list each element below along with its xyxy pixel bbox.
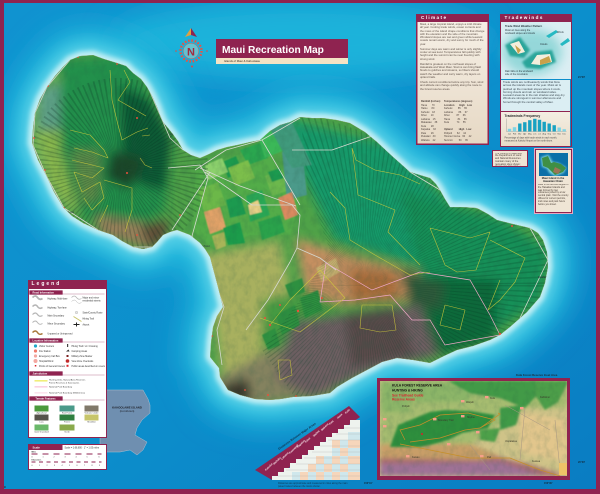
road information section: Road Information	[32, 290, 54, 294]
terrain features section: Scrub	[64, 432, 70, 434]
climate data tables	[421, 100, 472, 142]
tradewind frequency chart: measured at Kahului Airport on the north shore.	[504, 140, 553, 142]
scale heading: Scale	[32, 446, 40, 450]
scale bars: 8	[92, 465, 93, 467]
inset place labels: Waipoli	[466, 401, 474, 404]
road information section: Highway, Multi-lane	[48, 298, 68, 300]
title banner: Islands of Maui & Kahoolawe	[224, 59, 261, 63]
tradewinds heading	[500, 14, 572, 22]
climate and tradewinds frames	[416, 14, 489, 145]
tradewind frequency chart	[501, 112, 570, 146]
coastal place names: Hana	[512, 219, 519, 222]
climate data tables: Rainfall (inches) Hana 70 Haiku 80 Kahului 18 Kihei 10 Lahaina 15 Makawao 38 Kula 28 Kapalua 33 Paia 26 Pukalani 30 Wailuku 22	[421, 100, 440, 142]
coordinate ticks: 156°00'	[544, 482, 553, 485]
scale bars	[32, 452, 102, 467]
compass rose: N	[187, 46, 195, 58]
coastal place names: Makena	[182, 330, 192, 333]
inset place labels	[402, 396, 550, 463]
location information section: Military Zone Marker	[72, 355, 93, 358]
road information section: Unpaved or Unimproved	[48, 332, 73, 336]
Kula forest reserve inset: Kula Forest Reserve Inset Area	[516, 373, 558, 377]
scale bars: 5	[86, 456, 88, 458]
location information section: Hiking Trail / Ltr. Crossing	[72, 345, 98, 348]
tradewinds diagram: windward slopes and clouds	[505, 32, 536, 35]
Kahoolawe island shape	[100, 390, 150, 455]
coastal place names: Honokeana	[19, 103, 32, 106]
inset place labels: Boundary Trail	[438, 419, 454, 422]
legend heading	[28, 280, 106, 288]
coordinate ticks: 60	[3, 486, 6, 489]
coastal place names: Kamaole	[176, 270, 186, 273]
tradewinds heading: Tradewinds	[504, 14, 544, 20]
roads	[33, 60, 548, 365]
road information section: Minor Secondary	[48, 322, 66, 326]
tradewind frequency chart: Aug	[543, 132, 546, 136]
scale bars: 2	[46, 465, 48, 467]
coastal place names: Kahana	[24, 111, 33, 114]
tradewind frequency chart: May	[528, 134, 532, 136]
relief ridges	[73, 123, 460, 380]
terrain colours	[32, 55, 548, 400]
climate paragraphs: Summer days are warm and winter is only slightly cooler at sea level. Temperatures fall quickly with height and the summit can be near freezing with strong wind.	[420, 47, 481, 60]
tradewind frequency chart: Jun	[533, 134, 536, 136]
Kula forest reserve inset	[377, 373, 570, 480]
mileage triangle chart: paved routes between the towns shown.	[278, 485, 321, 488]
coastal place names: Lahaina	[26, 171, 36, 174]
title banner: Maui Recreation Map	[222, 45, 324, 56]
upcountry farm patches	[262, 258, 340, 350]
Kahoolawe island shape: KAHOOLAWE ISLAND	[112, 406, 142, 410]
coastal place names: Kahakuloa	[112, 56, 124, 59]
terrain features section: Open Grassland	[34, 432, 49, 434]
Kahoolawe island shape: (not shown)	[120, 409, 134, 413]
tradewind frequency chart: Jan	[508, 134, 511, 136]
scale bars: 1	[39, 465, 40, 467]
terrain features section: Volcanic Cinder	[85, 412, 99, 414]
jurisdiction section: Forest Reserves & Sanctuaries	[49, 382, 80, 384]
scale heading	[28, 444, 100, 450]
scale bars: 2	[54, 456, 55, 458]
scale bars: 4	[62, 465, 63, 467]
divider	[500, 110, 570, 112]
panel: climate heading: Climate	[421, 15, 447, 20]
scale bars: 1	[42, 456, 44, 458]
coastal place names: Kealia Pond	[196, 245, 210, 248]
terrain features section: Rain Forest	[62, 412, 73, 414]
coastal place names: La Perouse	[188, 348, 201, 351]
tradewinds text: Trade winds are northeasterly winds that blow across the islands most of the year. Moist air is pushed up the mountain slopes where it cools, forming clouds and rain on windward sides. Leeward areas lie in the rain shadow and stay dry. Winds are strongest in summer afternoons and funnel through the central valley of Maui.	[503, 80, 565, 104]
tradewinds diagram: Trade Wind Weather Pattern	[505, 24, 543, 28]
inset place labels: Pali	[487, 456, 491, 459]
diagonal place names: Kaanapali	[288, 443, 300, 455]
coastal place names: Hamoa	[552, 226, 561, 229]
locator caption: Maui Island in the Hawaiian Chain	[542, 177, 564, 183]
jurisdiction section: Hunting Units, Natural Area Reserves	[49, 378, 86, 382]
coastal place names	[68, 133, 546, 278]
location information section	[30, 338, 107, 368]
inset place labels: Skyline	[467, 416, 475, 419]
terrain features section: Forest	[64, 420, 70, 424]
coastal place names: Nahiku	[455, 198, 463, 201]
locator map	[539, 153, 568, 176]
coastal place names: Hookipa	[258, 126, 268, 129]
inset place labels: Kanaio	[412, 456, 420, 459]
coastal place names: Black Rock	[20, 153, 33, 156]
coastal place names: Kihei	[175, 256, 181, 259]
road information section: Major and minor	[82, 296, 99, 300]
tradewind frequency chart: Mar	[518, 132, 522, 136]
terrain features section: Shoreline	[87, 422, 97, 424]
jurisdiction section: National Park Boundary (Wilderness)	[49, 392, 85, 394]
coastal place names: Papalaua	[70, 226, 81, 229]
diagonal place names: Makena	[320, 422, 330, 432]
tradewinds diagram: Moist air rises along the	[505, 29, 531, 32]
location information section: Emergency Call Box	[39, 355, 61, 358]
coastline	[32, 55, 548, 400]
coastal place names: Wailua	[430, 168, 438, 171]
panel: tradewinds	[500, 14, 572, 147]
title banner	[216, 39, 348, 64]
panel: climate heading	[416, 14, 489, 22]
climate paragraphs: Check current conditions before any trip. Sun, wind and altitude can change quickly along the route to the forest reserve areas.	[420, 80, 483, 90]
tradewinds diagram: Clouds	[540, 43, 548, 46]
location information section: Visitor Centers	[39, 345, 55, 348]
location information section: Location Information	[32, 338, 59, 342]
diagonal place names	[264, 408, 351, 472]
scale bars: 3	[64, 456, 66, 458]
terrain features section: Terrain Features	[35, 396, 56, 400]
jurisdiction section: National Park Boundary	[49, 386, 73, 388]
panel: legend	[28, 280, 107, 438]
coastal place names: Koki Beach	[553, 238, 566, 241]
legend heading: Legend	[32, 280, 61, 286]
scale heading: Scale = 1:66,800 · 1" = 1.05 miles	[64, 448, 100, 450]
coastal place names: Launiupoko	[30, 189, 44, 192]
scale bars: Miles	[32, 452, 36, 454]
climate paragraphs: Rainfall is greatest on the northeast slopes of Haleakala and West Maui. Storms can bring flash floods to gulches and streams, so hikers should watch the weather and carry warm, dry layers on upland trails.	[420, 62, 481, 79]
road information section: Hiking Trail	[82, 318, 94, 320]
scale bars: Kilometers	[32, 458, 41, 462]
road information section: Main Secondary	[48, 314, 65, 318]
coastal place names: Ukumehame	[60, 211, 75, 214]
location information section: View Zone Overlooks	[72, 360, 94, 363]
road information section: Airport	[82, 324, 90, 326]
diagonal place names: Wailuku	[272, 456, 282, 466]
coastal place names: Kahului	[182, 145, 191, 148]
climate paragraphs	[420, 23, 484, 90]
note panel	[492, 150, 528, 167]
scale bars: 0	[32, 465, 33, 467]
coastal place names: Kaupo	[420, 368, 428, 371]
coastal place names: Kipahulu	[538, 276, 548, 279]
location information section: Fire Station	[39, 350, 51, 353]
tradewinds text	[501, 80, 570, 111]
inset place labels: Polipoli	[402, 405, 410, 408]
coastal place names: Kapalua	[22, 82, 32, 85]
tradewind frequency chart: Percentage of days with trade winds in each month,	[504, 136, 557, 140]
footnote: Distances are approximate and measured in miles along the main	[278, 482, 348, 485]
jurisdiction section	[30, 372, 104, 394]
coastal place names: Keanae	[415, 161, 424, 164]
mileage triangle chart	[255, 406, 360, 488]
national park boundary	[320, 263, 500, 345]
inset place labels: Kula	[490, 397, 495, 400]
tradewind frequency chart: Oct	[553, 132, 556, 136]
inset heading: Reserve Areas	[392, 398, 415, 402]
scale bars: 3	[54, 465, 55, 467]
scale bars: 4	[76, 456, 77, 458]
diagonal place names: Wailea	[312, 429, 321, 438]
diagonal place names: Kula	[344, 408, 351, 415]
forest reserve trails	[70, 70, 525, 380]
coastal place names: McGregor Point	[98, 236, 116, 239]
coastal place names: Honokowai	[18, 124, 31, 127]
coastal place names: Kanaio	[258, 403, 266, 406]
compass rose	[175, 28, 208, 68]
tradewind frequency chart: Nov	[558, 134, 561, 136]
tradewind frequency chart: Sep	[548, 134, 551, 136]
park and landmark markers	[33, 56, 546, 397]
coastal place names: Polo Beach	[178, 312, 191, 315]
inset heading	[392, 384, 443, 402]
tradewinds diagram: Rain falls on the windward	[505, 70, 534, 73]
road information section: State/County Route	[82, 312, 103, 314]
locator card	[535, 149, 572, 213]
panel: scale bar	[28, 444, 107, 470]
climate text block	[420, 23, 484, 142]
scale bars: 0	[32, 456, 33, 458]
tradewinds diagram: side of the mountains	[505, 73, 529, 76]
diagonal place names: Kapalua	[296, 438, 306, 449]
inset place labels: Kahikinui	[540, 396, 550, 399]
coastal place names: Keawakapu	[178, 285, 192, 288]
scale bars: 6	[98, 456, 100, 458]
isthmus farmland	[192, 122, 312, 250]
tradewind frequency chart: Feb	[513, 134, 516, 136]
scale bars: 6	[76, 465, 78, 467]
coordinate ticks: 20°30'	[578, 461, 586, 464]
diagonal place names: Kihei	[304, 436, 311, 444]
coastal place names: Maalaea	[136, 250, 146, 253]
triangle caption: Distances Between Major Areas	[277, 421, 317, 451]
road information section	[30, 290, 104, 336]
tradewind frequency chart: Jul	[538, 134, 541, 136]
coordinate ticks: 21°00'	[578, 76, 586, 79]
coastal place names: Kaanapali	[20, 140, 32, 143]
coastal place names: Wailea	[176, 298, 184, 301]
coastal place names: Hana Hwy	[484, 201, 496, 204]
coastal place names: Olowalu	[44, 200, 54, 203]
road information section: Highway, Two-lane	[48, 308, 67, 310]
inset heading: See Trailhead Guide	[392, 394, 424, 398]
road information section: residential streets	[82, 300, 101, 302]
coordinate ticks: 156°10'	[364, 482, 373, 485]
tradewind frequency chart: Dec	[563, 134, 566, 136]
inset heading: HUNTING & HIKING	[392, 388, 423, 392]
coastal place names: Honokohau	[66, 51, 79, 54]
inset place labels: Ulupalakua	[505, 440, 518, 443]
coastal place names: Kipahulu	[500, 343, 510, 346]
diagonal place names: Paia	[328, 419, 335, 426]
coastal place names: Haiku	[283, 110, 290, 113]
location information section: Hospital/Clinic	[39, 360, 54, 363]
tradewinds diagram: Winds	[557, 31, 564, 34]
terrain features section	[30, 396, 104, 434]
coastal place names: Wailuku	[170, 133, 179, 136]
inset heading: KULA FOREST RESERVE AREA	[392, 384, 443, 388]
coastal place names: Waihee Point	[140, 64, 155, 67]
tradewinds diagram	[501, 22, 571, 79]
scale bars: 5	[69, 465, 70, 467]
terrain features section: Agricultural	[36, 412, 47, 414]
diagonal place names: Kahului	[264, 462, 274, 472]
terrain features section: Lava	[39, 422, 45, 424]
diagonal place names: Hana	[336, 412, 344, 420]
coastal place names: Paia	[228, 138, 234, 141]
inset place labels: Keokea	[532, 460, 541, 463]
jurisdiction section: Jurisdiction	[32, 372, 48, 376]
tradewind frequency chart: Apr	[523, 132, 527, 136]
location information section: Camping Areas	[72, 350, 88, 353]
climate data tables: Temperatures (degrees) Location High Low Kahului 85 65 Lahaina 86 67 Kihei 87 66 Hana 81 65 Kula 74 55 Upland High Low Polipoli 62 44 Hosmer Grove 60 42 Summit 50 35	[444, 100, 472, 142]
tradewind frequency chart: Tradewinds Frequency	[504, 114, 540, 118]
location information section: Points of General Interest	[39, 365, 65, 368]
diagonal place names: Lahaina	[280, 451, 290, 461]
scale bars: 9	[99, 465, 100, 467]
scale bars: 7	[84, 465, 85, 467]
